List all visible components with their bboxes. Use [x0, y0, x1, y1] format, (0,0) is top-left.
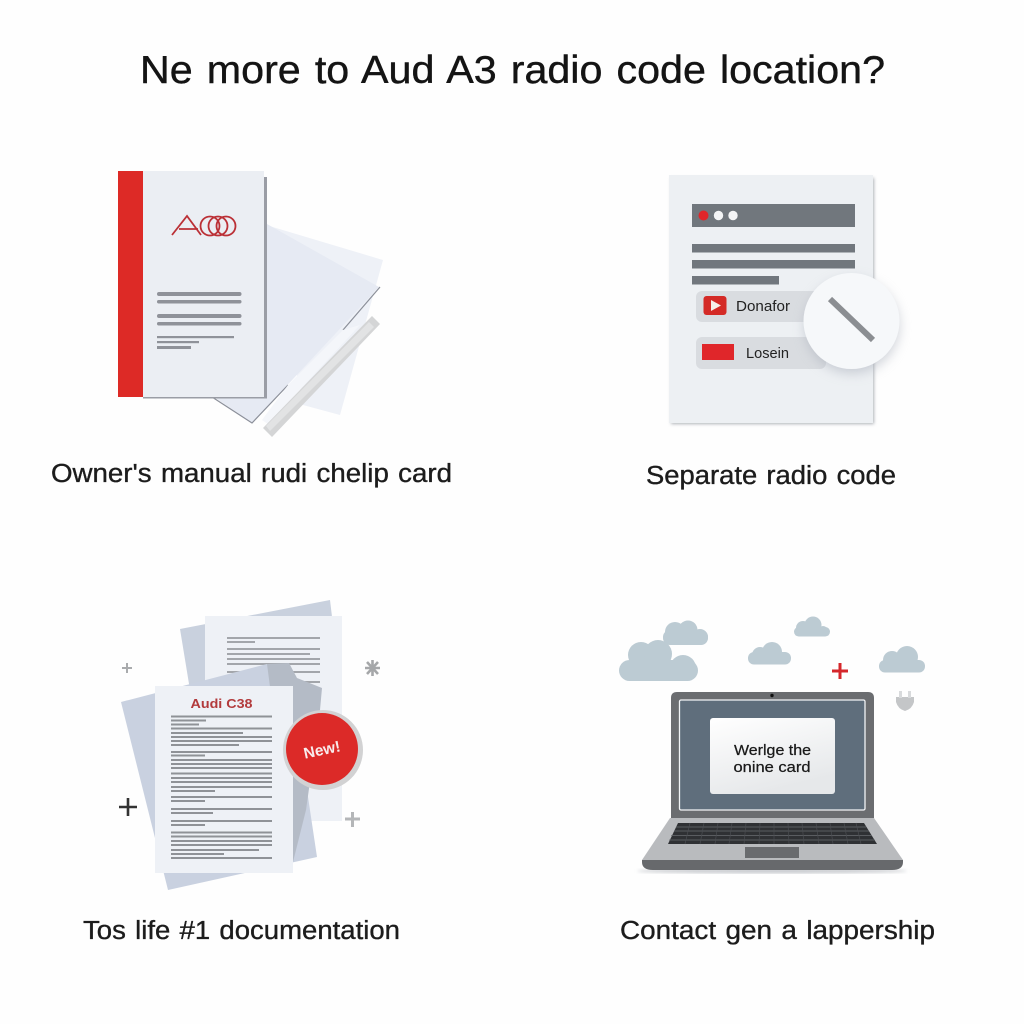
label: separate radio code: Separate radio code: [646, 462, 896, 490]
icon: loose sheets behind manual: [212, 224, 383, 424]
panel: documentation: [119, 600, 380, 890]
icon: clouds: [619, 616, 925, 681]
screen card: [710, 718, 835, 794]
title: Ne more to Aud A3 radio code location?: [140, 49, 885, 92]
icon: plug: [896, 691, 914, 711]
icon: middle sheets: [121, 663, 322, 890]
label: contact: Contact gen a lappership: [620, 917, 935, 945]
icon: round magnifier button: [804, 273, 900, 373]
text lines: [171, 716, 272, 859]
button: Donafor: [696, 291, 826, 322]
panel: owner's manual: [118, 171, 383, 437]
label: documentation: Tos life #1 documentation: [83, 917, 400, 945]
screen card: onine card: [734, 760, 810, 776]
front page: [155, 686, 293, 873]
icon: pen: [263, 316, 380, 437]
icon: back sheets: [180, 600, 342, 821]
panel: separate radio code: [669, 175, 900, 424]
label: owner's manual: Owner's manual rudi chelip card: [51, 460, 452, 488]
laptop lid: [671, 692, 874, 818]
keyboard: [668, 823, 877, 844]
button: Losein: Losein: [746, 346, 789, 362]
text lines: [692, 244, 855, 284]
window bar: [692, 204, 855, 227]
button: Losein: [696, 337, 826, 369]
badge: New: New!: [302, 738, 342, 763]
icon: red plus: [832, 663, 848, 679]
text lines: [157, 292, 242, 349]
panel: online laptop: [619, 616, 925, 874]
laptop base: [637, 818, 907, 874]
icon: sparkles: [119, 660, 380, 827]
logo: [172, 216, 236, 236]
screen card: Werlge the: [734, 743, 811, 759]
trackpad: [745, 847, 799, 858]
sheet: [669, 175, 874, 424]
badge: New: [283, 710, 363, 790]
button: Donafor: Donafor: [736, 299, 790, 315]
icon: manual cover: [118, 171, 267, 398]
heading: Audi C38: [190, 696, 252, 711]
